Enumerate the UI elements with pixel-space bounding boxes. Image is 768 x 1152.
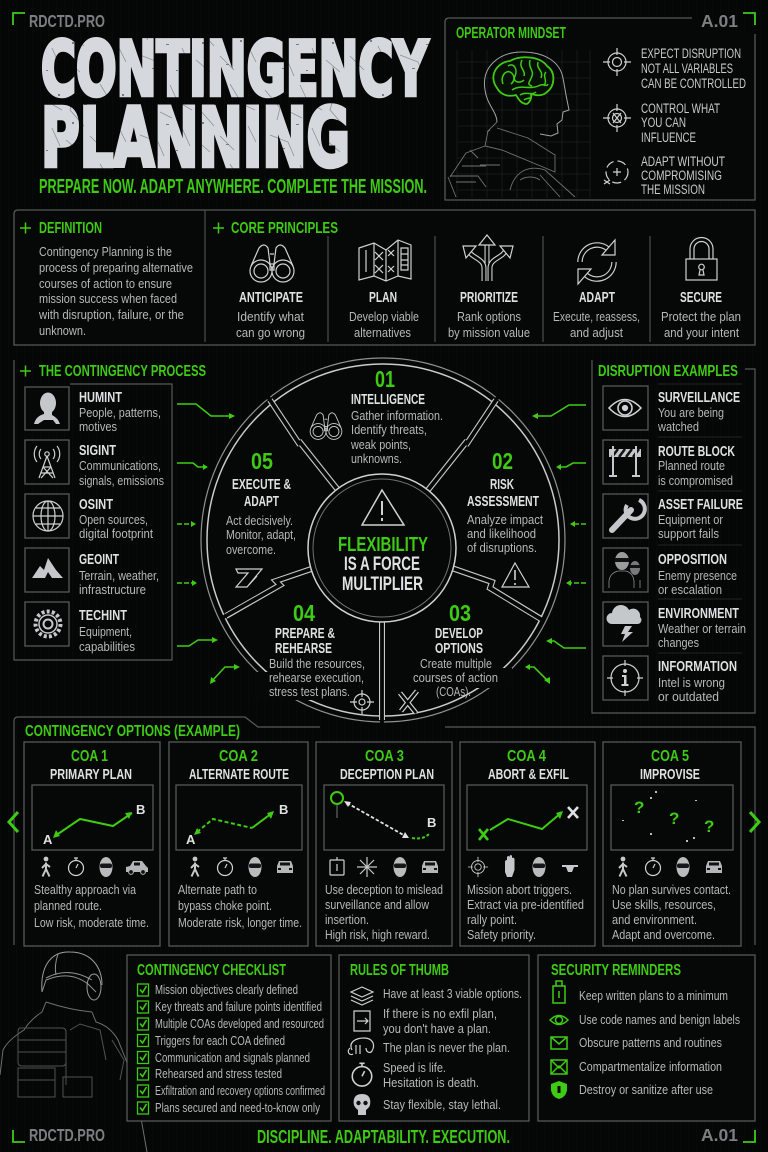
text: surveillance: You are being bbox=[658, 406, 724, 420]
principle: plan bbox=[349, 240, 419, 340]
label: plan: PLAN bbox=[369, 290, 397, 306]
footer tag: A.01: A.01 bbox=[701, 1125, 738, 1145]
icon: globe bbox=[25, 494, 69, 538]
panel: intelligence disciplines bbox=[14, 360, 206, 660]
text: coa 5 description: No plan survives contact. bbox=[612, 883, 731, 897]
icon: eye bbox=[550, 1016, 568, 1024]
text: techint: capabilities bbox=[79, 640, 135, 654]
label: secure: SECURE bbox=[680, 290, 722, 306]
text: coa 5 description bbox=[612, 883, 731, 942]
icon: skull bbox=[354, 1094, 370, 1115]
segment 03: develop options: DEVELOP bbox=[435, 626, 483, 642]
text: humint bbox=[79, 390, 161, 434]
heading: core principles: CORE PRINCIPLES bbox=[231, 220, 338, 237]
text: environment: Weather or terrain bbox=[658, 622, 746, 636]
header corner bracket bbox=[13, 13, 25, 25]
checklist item 1: Mission objectives clearly defined bbox=[155, 983, 298, 997]
item: route block bbox=[603, 440, 735, 488]
title: PLANNING bbox=[41, 92, 350, 186]
icons: resources bbox=[468, 855, 578, 877]
panel: disruption examples bbox=[592, 360, 755, 713]
segment 01: intelligence: Gather information. bbox=[351, 409, 443, 423]
icon: gear bbox=[25, 602, 69, 646]
checklist item 4: Triggers for each COA defined bbox=[155, 1034, 285, 1048]
panel: contingency checklist bbox=[127, 955, 331, 1121]
text: control what you can influence bbox=[641, 101, 720, 145]
text block: definition: with disruption, failure, or the bbox=[38, 308, 184, 322]
map: alternate route: B bbox=[279, 802, 288, 817]
text block: definition: process of preparing alternative bbox=[39, 261, 193, 275]
text: osint: Open sources, bbox=[79, 513, 148, 527]
connector arrows bbox=[177, 404, 586, 684]
heading: coa 3: COA 3 bbox=[365, 748, 404, 765]
segment 02: risk assessment: and likelihood bbox=[467, 527, 536, 541]
segment 04: prepare and rehearse: Build the resources, bbox=[269, 657, 365, 671]
principle: prioritize bbox=[448, 235, 530, 340]
text: coa 3 description: surveillance and allow bbox=[325, 898, 430, 912]
text: humint: HUMINT bbox=[79, 390, 122, 406]
icon: padlock bbox=[686, 238, 717, 280]
description: plan: Develop viable bbox=[349, 310, 419, 324]
text: route block: Planned route bbox=[658, 459, 725, 473]
segment 01: intelligence bbox=[310, 366, 443, 466]
map: deception plan bbox=[324, 785, 444, 850]
segment 01: intelligence: unknowns. bbox=[351, 452, 402, 466]
text: control what you can influence: YOU CAN bbox=[641, 115, 686, 130]
footer corner left bbox=[13, 1130, 25, 1142]
description: prioritize: by mission value bbox=[448, 326, 530, 340]
text block: definition: courses of action to ensure bbox=[39, 277, 172, 291]
segment 03: develop options: 03 bbox=[449, 600, 471, 626]
text: coa 3 description bbox=[325, 883, 443, 942]
panel: definition and core principles bbox=[14, 210, 755, 345]
process wheel bbox=[201, 358, 565, 724]
segment 05: execute and adapt: Monitor, adapt, bbox=[226, 528, 296, 542]
map: primary plan bbox=[32, 785, 153, 850]
icon: head silhouette bbox=[25, 387, 69, 430]
text: information: or outdated bbox=[658, 690, 719, 704]
segment 02: risk assessment: 02 bbox=[492, 448, 513, 474]
item: environment bbox=[603, 602, 746, 650]
icon: branching arrows bbox=[463, 235, 513, 281]
panel: security reminders bbox=[538, 955, 755, 1121]
header tag: RDCTD.PRO: RDCTD.PRO bbox=[29, 11, 105, 31]
header tag: A.01: A.01 bbox=[701, 11, 738, 31]
text: geoint: GEOINT bbox=[79, 552, 119, 568]
map: improvise: ? bbox=[669, 809, 679, 828]
label: anticipate: ANTICIPATE bbox=[239, 290, 303, 306]
icon: chevron left bbox=[9, 812, 18, 832]
segment 02: risk assessment bbox=[467, 448, 543, 587]
segment 01: intelligence: INTELLIGENCE bbox=[351, 392, 425, 408]
rule 5 bbox=[354, 1094, 501, 1115]
checklist item 8: Plans secured and need-to-know only bbox=[155, 1101, 321, 1115]
footer tag: RDCTD.PRO: RDCTD.PRO bbox=[29, 1125, 105, 1145]
text: route block: is compromised bbox=[658, 474, 733, 488]
text: information: Intel is wrong bbox=[658, 676, 725, 690]
icon: map bbox=[359, 240, 411, 281]
text: coa 5 description: Adapt and overcome. bbox=[612, 928, 715, 942]
text block: definition: Contingency Planning is the bbox=[39, 245, 172, 259]
icon: crossed tools bbox=[400, 691, 417, 713]
label: adapt: ADAPT bbox=[579, 290, 615, 306]
icon: exit door bbox=[354, 1011, 370, 1031]
rule 1: Have at least 3 viable options. bbox=[383, 987, 522, 1001]
text: opposition bbox=[658, 552, 737, 597]
map: alternate route: A bbox=[186, 832, 196, 847]
text: coa 3 description: Use deception to mislead bbox=[325, 883, 443, 897]
segment 05: execute and adapt: EXECUTE & bbox=[232, 477, 291, 493]
text: coa 5 description: and environment. bbox=[612, 913, 697, 927]
icon: refresh arrows bbox=[578, 240, 615, 284]
text: coa 3 description: insertion. bbox=[325, 913, 369, 927]
icon: eye bbox=[603, 386, 648, 430]
reminder 1 bbox=[553, 981, 728, 1003]
map: alternate route bbox=[176, 785, 302, 850]
item: sigint bbox=[25, 440, 164, 488]
segment 02: risk assessment: Analyze impact bbox=[467, 513, 543, 527]
icon: binoculars bbox=[310, 413, 342, 439]
text: asset failure: support fails bbox=[658, 527, 719, 541]
text: techint: TECHINT bbox=[79, 608, 127, 624]
map: abort and exfil bbox=[467, 785, 587, 850]
rule 1 bbox=[351, 987, 522, 1005]
subtitle: abort and exfil: ABORT & EXFIL bbox=[488, 767, 569, 783]
text: techint: Equipment, bbox=[79, 625, 132, 639]
illustration: operator head with green brain bbox=[448, 50, 590, 198]
reminder 3: Obscure patterns and routines bbox=[579, 1036, 722, 1050]
item: geoint bbox=[25, 548, 159, 597]
text: environment bbox=[658, 606, 746, 650]
item: humint bbox=[25, 387, 161, 434]
text: route block bbox=[658, 444, 735, 488]
hub text: MULTIPLIER bbox=[342, 574, 423, 595]
description: plan: alternatives bbox=[354, 326, 411, 340]
segment 03: develop options: OPTIONS bbox=[435, 641, 483, 657]
text: humint: People, patterns, bbox=[79, 406, 161, 420]
segment 04: prepare and rehearse: REHEARSE bbox=[275, 641, 332, 657]
segment 05: execute and adapt bbox=[226, 448, 296, 587]
header corner bracket right bbox=[743, 13, 755, 25]
text: surveillance: watched bbox=[657, 420, 699, 434]
segment 03: develop options bbox=[400, 600, 498, 713]
map: improvise bbox=[611, 785, 733, 850]
icons: resources bbox=[330, 857, 438, 877]
icon: adapt reticle bbox=[604, 161, 628, 184]
heading: coa 4: COA 4 bbox=[507, 748, 546, 765]
icon: stopwatch bbox=[352, 1063, 372, 1086]
principle: anticipate bbox=[236, 245, 305, 340]
text: osint: digital footprint bbox=[79, 527, 153, 541]
checklist item 7: Exfiltration and recovery options confirmed bbox=[155, 1084, 325, 1098]
text: adapt without compromising bbox=[641, 154, 725, 197]
text block: definition: mission success when faced bbox=[39, 292, 177, 306]
description: secure: and your intent bbox=[664, 326, 739, 340]
segment 05: execute and adapt: overcome. bbox=[226, 543, 276, 557]
text: coa 1 description bbox=[34, 883, 149, 930]
text: surveillance bbox=[657, 390, 740, 434]
panel: rules of thumb bbox=[339, 955, 529, 1121]
icon: storm cloud bbox=[603, 602, 648, 646]
description: prioritize bbox=[448, 310, 530, 340]
segment 03: develop options: Create multiple bbox=[420, 657, 492, 671]
text: coa 4 description: Extract via pre-identified bbox=[467, 898, 584, 912]
subtitle: deception plan: DECEPTION PLAN bbox=[340, 767, 434, 783]
reminder 4: Compartmentalize information bbox=[579, 1060, 722, 1074]
subtitle: improvise: IMPROVISE bbox=[640, 767, 700, 783]
segment 04: prepare and rehearse: 04 bbox=[293, 600, 315, 626]
rule 4 bbox=[352, 1061, 479, 1090]
icon: chevron right bbox=[750, 812, 759, 832]
text: information bbox=[658, 659, 737, 704]
text: coa 1 description: Stealthy approach via bbox=[34, 883, 136, 897]
text: adapt without compromising: COMPROMISING bbox=[641, 168, 722, 183]
rule 2: If there is no exfil plan, bbox=[383, 1007, 497, 1021]
reminder 1: Keep written plans to a minimum bbox=[579, 989, 728, 1003]
item: osint bbox=[25, 494, 153, 541]
text: adapt without compromising: ADAPT WITHOUT bbox=[641, 154, 725, 169]
rule 2 bbox=[354, 1007, 497, 1036]
heading: coa 5: COA 5 bbox=[651, 748, 689, 765]
map: primary plan: A bbox=[43, 832, 53, 847]
icons: resources bbox=[42, 857, 148, 877]
segment 04: prepare and rehearse: rehearse execution, bbox=[269, 671, 364, 685]
principle: adapt bbox=[553, 240, 640, 340]
text: geoint bbox=[79, 552, 159, 597]
segment 03: develop options: (COAs). bbox=[436, 685, 471, 699]
checklist item 7 bbox=[138, 1084, 325, 1098]
text: information: INFORMATION bbox=[658, 659, 737, 675]
text: coa 1 description: planned route. bbox=[34, 899, 102, 913]
text: opposition: OPPOSITION bbox=[658, 552, 727, 568]
card: coa 2 bbox=[169, 742, 308, 946]
text: adapt without compromising: THE MISSION bbox=[641, 182, 705, 197]
heading: security reminders: SECURITY REMINDERS bbox=[551, 962, 681, 979]
icon: info reticle bbox=[603, 656, 648, 700]
icon: wrench bbox=[603, 494, 648, 538]
map: primary plan: B bbox=[136, 802, 145, 817]
text: geoint: Terrain, weather, bbox=[79, 569, 159, 583]
icon: mountains bbox=[25, 548, 69, 592]
description: anticipate bbox=[236, 310, 305, 340]
footer corner right bbox=[743, 1130, 755, 1142]
description: secure: Protect the plan bbox=[661, 310, 741, 324]
description: adapt: Execute, reassess, bbox=[553, 310, 640, 324]
icon: document bbox=[553, 981, 565, 1003]
hub text bbox=[338, 534, 428, 595]
text: sigint bbox=[79, 443, 164, 488]
icon: binoculars bbox=[250, 245, 294, 282]
icon: radio tower bbox=[25, 440, 69, 484]
card: coa 3 bbox=[316, 742, 452, 946]
description: adapt bbox=[553, 310, 640, 340]
icon: shield bbox=[551, 1081, 567, 1099]
illustration: soldier from behind bbox=[0, 952, 147, 1152]
text: environment: ENVIRONMENT bbox=[658, 606, 739, 622]
text: humint: motives bbox=[79, 420, 117, 434]
text: coa 2 description: Alternate path to bbox=[178, 883, 257, 897]
segment 05: execute and adapt: ADAPT bbox=[244, 494, 279, 510]
checklist item 5: Communication and signals planned bbox=[155, 1051, 310, 1065]
text: osint bbox=[79, 497, 153, 541]
description: adapt: and adjust bbox=[570, 326, 623, 340]
subtitle: primary plan: PRIMARY PLAN bbox=[50, 767, 132, 783]
segment 01: intelligence: Identify threats, bbox=[351, 423, 427, 437]
item: information bbox=[603, 656, 737, 704]
heading: definition: DEFINITION bbox=[39, 220, 102, 237]
text: sigint: Communications, bbox=[79, 459, 161, 473]
text block: definition bbox=[38, 245, 193, 338]
text: geoint: infrastructure bbox=[79, 583, 146, 597]
description: prioritize: Rank options bbox=[457, 310, 521, 324]
heading: coa 1: COA 1 bbox=[71, 748, 108, 765]
text: environment: changes bbox=[658, 636, 699, 650]
text: coa 4 description: Safety priority. bbox=[467, 928, 536, 942]
description: secure bbox=[661, 310, 741, 340]
card: coa 5 bbox=[603, 742, 741, 946]
segment 02: risk assessment: RISK bbox=[490, 477, 514, 493]
reminder 5: Destroy or sanitize after use bbox=[579, 1083, 713, 1097]
heading: coa 2: COA 2 bbox=[219, 748, 258, 765]
text: coa 3 description: High risk, high reward. bbox=[325, 928, 430, 942]
icon: reticle bbox=[350, 690, 374, 714]
reminder 5 bbox=[551, 1081, 713, 1099]
spokes bbox=[226, 400, 541, 720]
icon: elephant bbox=[348, 1038, 374, 1055]
segment 03: develop options: courses of action bbox=[413, 671, 498, 685]
heading: contingency options: CONTINGENCY OPTIONS (EXAMPLE) bbox=[25, 723, 240, 740]
text block: definition: unknown. bbox=[39, 324, 86, 338]
rule 5: Stay flexible, stay lethal. bbox=[383, 1098, 501, 1112]
heading: the contingency process: THE CONTINGENCY PROCESS bbox=[39, 363, 206, 380]
icon: warning bbox=[502, 563, 529, 587]
icon: patterns envelope bbox=[551, 1037, 567, 1049]
icon: layers bbox=[351, 987, 373, 1005]
description: anticipate: can go wrong bbox=[236, 326, 305, 340]
segment 04: prepare and rehearse: PREPARE & bbox=[275, 626, 335, 642]
text: opposition: or escalation bbox=[658, 583, 722, 597]
segment 04: prepare and rehearse bbox=[269, 600, 374, 714]
segment 05: execute and adapt: 05 bbox=[251, 448, 273, 474]
icons: resources bbox=[619, 857, 722, 877]
description: anticipate: Identify what bbox=[237, 310, 304, 324]
text: coa 1 description: Low risk, moderate time. bbox=[34, 916, 149, 930]
footer slogan: DISCIPLINE. ADAPTABILITY. EXECUTION. bbox=[257, 1127, 510, 1147]
segment 02: risk assessment: of disruptions. bbox=[467, 541, 537, 555]
icon: barricade bbox=[603, 440, 648, 484]
label: prioritize: PRIORITIZE bbox=[460, 290, 518, 306]
heading: operator mindset: OPERATOR MINDSET bbox=[456, 25, 566, 42]
principle: secure bbox=[661, 238, 741, 340]
title: CONTINGENCY bbox=[41, 25, 429, 113]
icon: target bbox=[603, 48, 631, 76]
icons: resources bbox=[191, 857, 293, 877]
text: expect disruption bbox=[641, 46, 746, 91]
text: coa 4 description: Mission abort triggers. bbox=[467, 883, 572, 897]
text: coa 4 description: rally point. bbox=[467, 913, 517, 927]
rule 4: Hesitation is death. bbox=[383, 1076, 479, 1090]
text: control what you can influence: INFLUENCE bbox=[641, 130, 696, 145]
section: contingency options bbox=[9, 717, 759, 946]
text: route block: ROUTE BLOCK bbox=[658, 444, 735, 460]
text: coa 2 description: Moderate risk, longer time. bbox=[178, 916, 302, 930]
text: sigint: SIGINT bbox=[79, 443, 116, 459]
subtitle: alternate route: ALTERNATE ROUTE bbox=[189, 767, 289, 783]
card: coa 1 bbox=[24, 742, 160, 946]
rule 3 bbox=[348, 1038, 510, 1055]
segment 01: intelligence: 01 bbox=[375, 366, 395, 392]
icon: plus process bbox=[20, 366, 31, 376]
icon: compartments bbox=[551, 1060, 567, 1074]
heading: checklist: CONTINGENCY CHECKLIST bbox=[137, 962, 286, 979]
description: plan bbox=[349, 310, 419, 340]
rule 2: you don't have a plan. bbox=[383, 1022, 491, 1036]
rule 3: The plan is never the plan. bbox=[383, 1041, 510, 1055]
item: techint bbox=[25, 602, 135, 654]
text: coa 4 description bbox=[467, 883, 584, 942]
segment 01: intelligence: weak points, bbox=[350, 438, 411, 452]
text: coa 5 description: Use skills, resources, bbox=[612, 898, 716, 912]
checklist item 3 bbox=[138, 1017, 324, 1031]
text: coa 2 description: bypass choke point. bbox=[178, 899, 272, 913]
item: surveillance bbox=[603, 386, 740, 434]
hub text: FLEXIBILITY bbox=[338, 534, 428, 556]
checklist item 6: Rehearsed and stress tested bbox=[155, 1067, 282, 1081]
rule 4: Speed is life. bbox=[383, 1061, 446, 1075]
map: improvise: ? bbox=[634, 798, 644, 817]
text: osint: OSINT bbox=[79, 497, 113, 513]
text: control what you can influence: CONTROL WHAT bbox=[641, 101, 720, 116]
icon: plus core principles bbox=[213, 222, 224, 234]
card: coa 4 bbox=[460, 742, 595, 946]
map: deception plan: B bbox=[427, 815, 436, 830]
text: sigint: signals, emissions bbox=[79, 474, 164, 488]
text: opposition: Enemy presence bbox=[658, 569, 737, 583]
heading: rules of thumb: RULES OF THUMB bbox=[350, 962, 449, 979]
icon: crossed target bbox=[603, 104, 631, 132]
text: techint bbox=[79, 608, 135, 654]
item: opposition bbox=[603, 548, 737, 597]
segment 02: risk assessment: ASSESSMENT bbox=[467, 494, 539, 510]
panel: operator mindset bbox=[445, 11, 755, 200]
title bbox=[41, 25, 429, 186]
segment 05: execute and adapt: Act decisively. bbox=[226, 514, 293, 528]
map: improvise: ? bbox=[704, 817, 714, 836]
text: coa 2 description bbox=[178, 883, 302, 930]
text: asset failure: Equipment or bbox=[658, 513, 723, 527]
checklist item 3: Multiple COAs developed and resourced bbox=[155, 1017, 324, 1031]
checklist item 2: Key threats and failure points identified bbox=[155, 1000, 322, 1014]
hub text: IS A FORCE bbox=[344, 554, 420, 575]
text: surveillance: SURVEILLANCE bbox=[658, 390, 740, 406]
segment 04: prepare and rehearse: stress test plans. bbox=[269, 685, 350, 699]
tagline: PREPARE NOW. ADAPT ANYWHERE. COMPLETE THE MISSION. bbox=[39, 175, 427, 198]
icon: warning triangle bbox=[362, 490, 404, 525]
icon: chevron arrow bbox=[236, 569, 262, 587]
item: asset failure bbox=[603, 494, 743, 541]
icon: masked figures bbox=[603, 548, 648, 592]
text: asset failure bbox=[658, 497, 743, 541]
icon: plus definition bbox=[20, 222, 31, 234]
hub circle bbox=[308, 474, 456, 622]
checklist item 4 bbox=[138, 1034, 285, 1048]
